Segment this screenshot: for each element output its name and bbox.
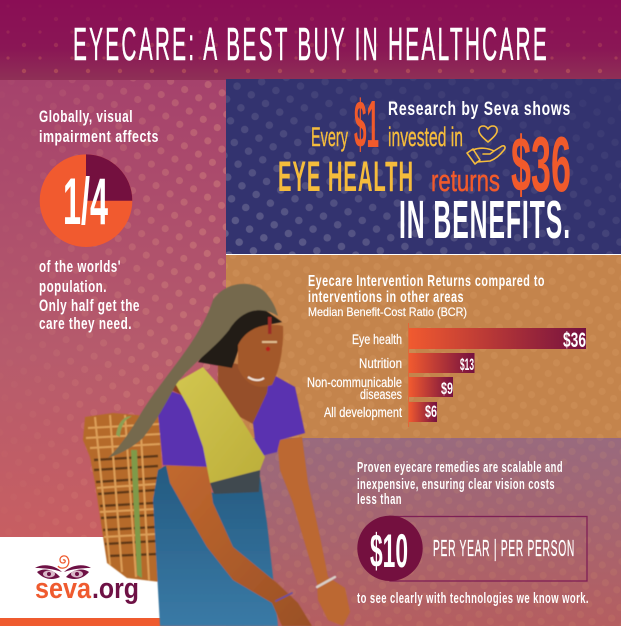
panel: return on investment: $1 xyxy=(354,87,379,162)
skirt xyxy=(153,465,278,626)
chart axis xyxy=(408,323,409,427)
statistic closing text xyxy=(39,258,140,333)
outlined price box xyxy=(390,516,587,581)
panel: return on investment: EYE HEALTH xyxy=(278,153,414,201)
bar: all development xyxy=(324,402,437,422)
logo: seva.org wordmark: .org xyxy=(92,573,139,605)
statistic closing text: of the worlds' xyxy=(39,258,121,276)
logo: swirl xyxy=(58,556,69,568)
panel: left background xyxy=(0,80,226,626)
bar: nutrition: $13 xyxy=(460,355,474,374)
panel: bar chart xyxy=(226,255,621,438)
bar: all development: $6 xyxy=(425,402,437,421)
neck and chest xyxy=(218,360,275,425)
statistic intro text: Globally, visual xyxy=(39,108,133,126)
left arm xyxy=(166,460,312,626)
yellow shawl xyxy=(175,367,265,483)
photo: woman with basket xyxy=(83,284,350,626)
panel: return on investment xyxy=(226,79,621,254)
returns text: returns xyxy=(431,163,500,198)
dark waist band xyxy=(210,470,260,494)
chart heading xyxy=(308,273,545,319)
basket xyxy=(83,413,162,582)
statistic closing text: care they need. xyxy=(39,315,132,333)
logo: right eye xyxy=(64,565,91,579)
statistic closing text: population. xyxy=(39,278,107,296)
logo: seva.org wordmark: seva xyxy=(35,573,92,605)
statistic intro text: impairment affects xyxy=(39,128,159,146)
price circle: $10 xyxy=(370,524,408,577)
face xyxy=(238,325,283,387)
icon: heart in hand xyxy=(467,126,505,164)
chart heading: Median Benefit-Cost Ratio (BCR) xyxy=(308,305,467,319)
bindi and forehead mark xyxy=(262,317,277,351)
panel: cost per person xyxy=(226,438,621,626)
bar: all development: All development xyxy=(324,405,402,420)
header band xyxy=(0,0,621,80)
bracelets xyxy=(276,577,335,601)
pie chart one quarter xyxy=(40,154,132,247)
price circle xyxy=(357,516,423,581)
every text: Every xyxy=(311,122,348,152)
cost intro text: less than xyxy=(357,492,402,508)
pie chart one quarter: 1/4 xyxy=(63,164,108,238)
bar: non-communicable diseases: diseases xyxy=(360,387,402,402)
right arm xyxy=(277,437,350,626)
bar: non-communicable diseases xyxy=(307,375,453,402)
invested in text: invested in xyxy=(388,122,463,152)
bar: nutrition: Nutrition xyxy=(359,356,402,371)
left column: impairment statistic xyxy=(39,108,159,333)
statistic intro text xyxy=(39,108,159,146)
headscarf xyxy=(108,284,278,458)
bar: eye health: $36 xyxy=(563,329,586,352)
cost intro text xyxy=(357,460,563,508)
smile xyxy=(248,377,264,380)
chart heading: interventions in other areas xyxy=(308,289,464,306)
bar: non-communicable diseases: Non-communicable xyxy=(307,375,402,390)
statistic closing text: Only half get the xyxy=(39,297,140,315)
brown shoulder strap xyxy=(168,383,192,398)
hair xyxy=(198,308,282,368)
purple blouse xyxy=(158,373,305,467)
logo panel xyxy=(0,537,164,626)
bar: non-communicable diseases: $9 xyxy=(441,379,453,398)
bar: nutrition xyxy=(359,353,474,374)
bar: eye health: Eye health xyxy=(352,332,402,347)
bar: eye health xyxy=(352,328,586,352)
logo: left eye xyxy=(35,565,62,579)
